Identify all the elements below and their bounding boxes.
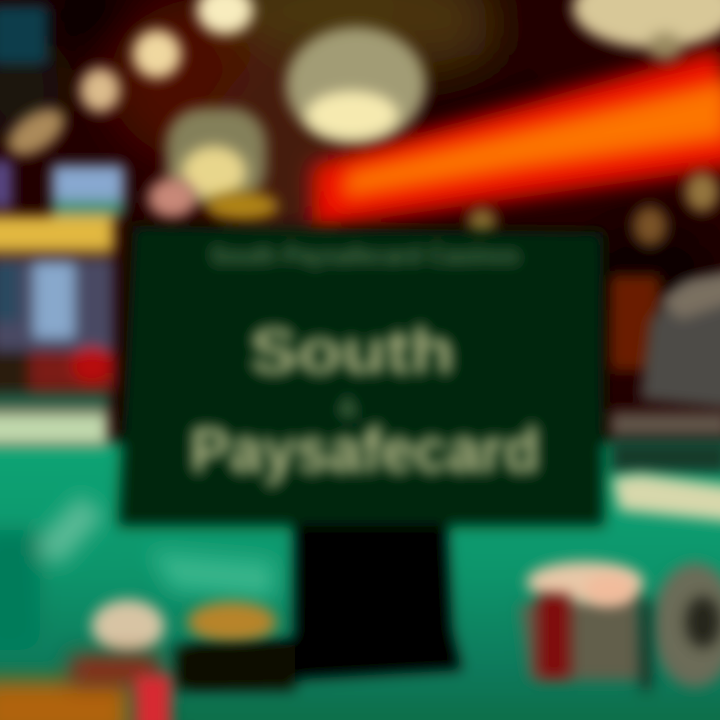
- lamp: top right: [573, 0, 720, 60]
- sign connector word: &: [339, 392, 357, 422]
- sign title: line one: South: [250, 315, 454, 387]
- dark green sign panel: [118, 226, 604, 526]
- ceiling lamps: [0, 0, 720, 246]
- background: ceiling: [0, 0, 720, 440]
- sign stand: [190, 500, 462, 685]
- sign small heading: South Paysafecard Casinos: [210, 242, 520, 270]
- background: casino felt table: [0, 442, 720, 720]
- right side: dark hat shape and light band: [610, 270, 720, 522]
- string of small lights: [0, 0, 719, 246]
- sign title: line two: Paysafecard: [190, 414, 540, 486]
- red and orange light streak: [312, 48, 720, 228]
- left slot machines: [0, 5, 124, 446]
- lamp: top centre: [286, 27, 426, 143]
- felt highlights: [0, 495, 275, 650]
- lamp: left of centre: [148, 108, 278, 220]
- poker chips: front left stack: [0, 600, 295, 720]
- poker chips: right stack: [520, 562, 720, 690]
